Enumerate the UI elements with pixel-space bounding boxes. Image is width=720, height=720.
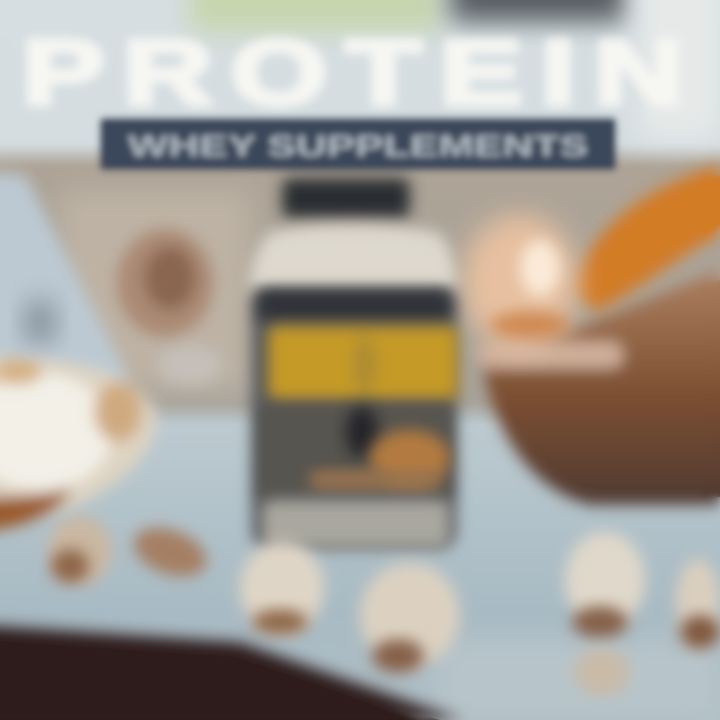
- carrot: [572, 165, 720, 312]
- bottle shoulder: [250, 225, 456, 292]
- bottle cap: [282, 178, 410, 218]
- edge backing for dark table and bowl: [0, 175, 720, 720]
- nuts: [48, 516, 720, 696]
- title: PROTEIN: [22, 22, 702, 124]
- bread: [0, 357, 156, 535]
- bowl: [478, 270, 720, 505]
- bottle yellow label: [268, 326, 458, 400]
- bottle: [250, 178, 458, 548]
- background walnut: [117, 229, 222, 385]
- bottle body: [252, 288, 456, 548]
- bottom dark table edge: [0, 622, 462, 720]
- subtitle banner: WHEY SUPPLEMENTS: [128, 130, 588, 163]
- warm glow: [462, 214, 578, 350]
- subtitle banner: [100, 118, 616, 170]
